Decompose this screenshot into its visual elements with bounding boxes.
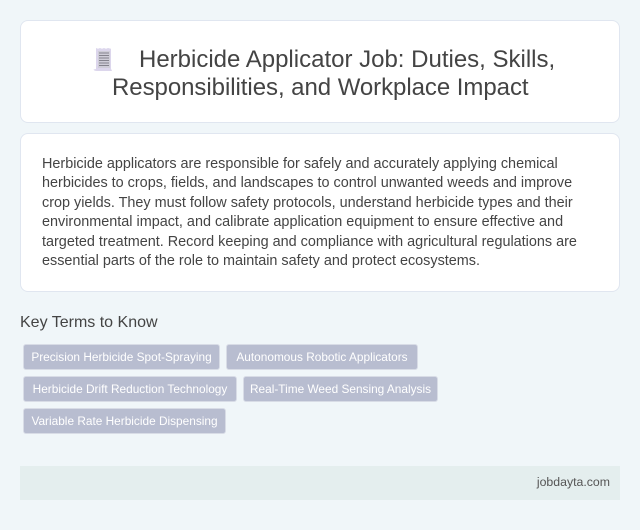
panel: title card — [20, 20, 620, 123]
description text: environmental impact, and calibrate application equipment to ensure effective and — [42, 214, 563, 230]
title line 2: Responsibilities, and Workplace Impact — [112, 74, 529, 101]
icon: document scroll — [94, 48, 112, 71]
footer source text: jobdayta.com — [537, 475, 610, 489]
term tag — [23, 344, 220, 370]
footer bar — [20, 466, 620, 500]
term tag — [226, 344, 418, 370]
term tag — [243, 376, 438, 402]
term tag: Autonomous Robotic Applicators — [236, 350, 408, 364]
description text: herbicides to crops, fields, and landscapes to control unwanted weeds and improve — [42, 175, 572, 191]
term tag: Precision Herbicide Spot-Spraying — [31, 350, 212, 364]
description text: essential parts of the role to maintain safety and protect ecosystems. — [42, 253, 480, 269]
description text — [42, 156, 577, 269]
title line 1: Herbicide Applicator Job: Duties, Skills, — [139, 46, 555, 73]
term tag: Herbicide Drift Reduction Technology — [33, 382, 227, 396]
heading: key terms: Key Terms to Know — [20, 314, 158, 331]
description text: targeted treatment. Record keeping and compliance with agricultural regulations are — [42, 234, 577, 250]
panel: description — [20, 133, 620, 292]
term tag: Real-Time Weed Sensing Analysis — [250, 382, 431, 396]
term tag — [23, 376, 237, 402]
description text: Herbicide applicators are responsible for safely and accurately applying chemical — [42, 156, 558, 172]
term tag: Variable Rate Herbicide Dispensing — [31, 414, 218, 428]
description text: crop yields. They must follow safety protocols, understand herbicide types and their — [42, 194, 573, 210]
term tag — [23, 408, 226, 434]
